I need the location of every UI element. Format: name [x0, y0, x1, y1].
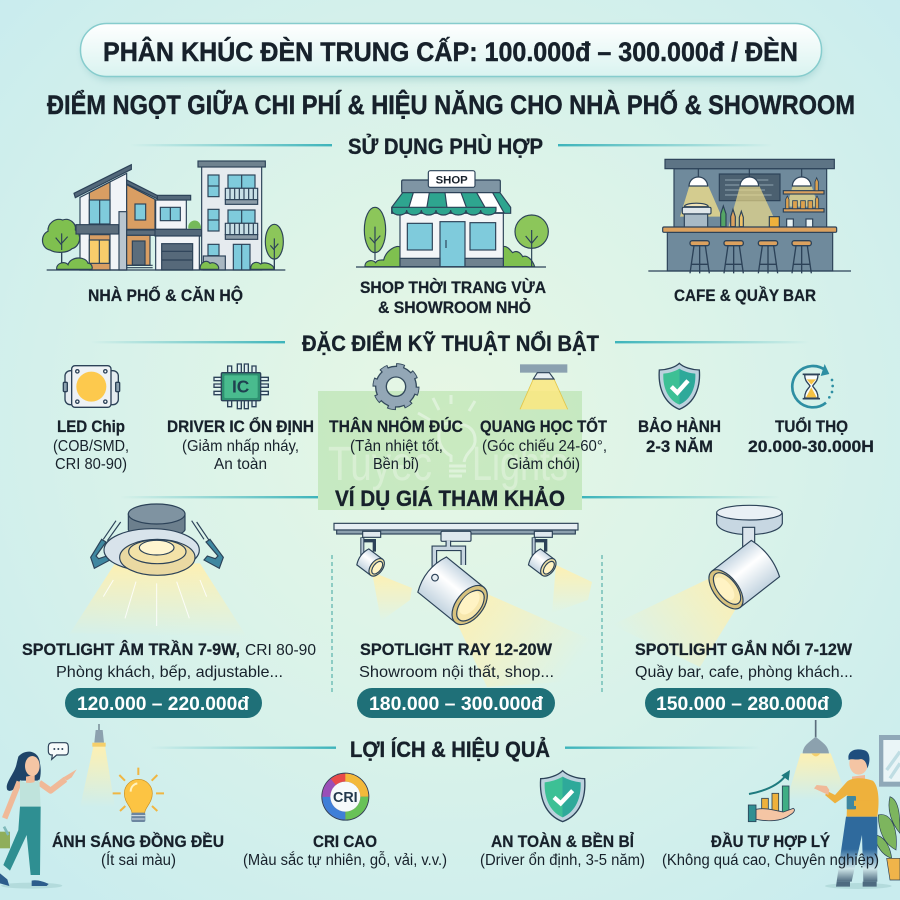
large head — [414, 541, 494, 631]
icon: CRI ring: CRI — [333, 790, 358, 806]
text: driver IC — [167, 417, 314, 473]
bottles and cups — [721, 206, 813, 227]
watermark panel — [318, 391, 582, 510]
product text: surface: Quầy bar, cafe, phòng khách... — [635, 664, 853, 681]
text: safe and durable: (Driver ổn định, 3-5 năm) — [480, 852, 645, 869]
speech bubble — [48, 743, 68, 759]
title pill: PHÂN KHÚC ĐÈN TRUNG CẤP: 100.000đ – 300.000đ / ĐÈN — [103, 37, 798, 67]
illustration: cafe bar — [648, 159, 851, 273]
illustration: man, lamp and plant — [787, 720, 900, 889]
coffee machine — [682, 203, 711, 227]
rail — [334, 523, 578, 541]
product text: track — [359, 640, 554, 681]
text: high CRI: CRI CAO — [313, 832, 377, 851]
icon: CRI ring — [321, 773, 369, 821]
trim ring — [104, 529, 199, 575]
text: lifespan — [748, 417, 874, 456]
light beam — [612, 578, 737, 667]
label: shop — [360, 278, 546, 317]
icon: LED chip — [63, 366, 120, 407]
section heading: benefits: LỢI ÍCH & HIỆU QUẢ — [350, 737, 550, 762]
text: even light — [52, 832, 224, 869]
product text: track: Showroom nội thất, shop... — [359, 664, 554, 681]
price pill: track: 180.000 – 300.000đ — [369, 693, 543, 715]
product text: recessed: SPOTLIGHT ÂM TRẦN 7-9W, — [22, 640, 240, 659]
icon: investment chart — [748, 770, 794, 822]
text: LED chip: (COB/SMD, — [53, 438, 129, 455]
shop sign — [428, 171, 475, 187]
bar wall — [665, 159, 834, 228]
cylinder — [702, 538, 783, 615]
counter — [663, 227, 837, 271]
section heading: technical features: ĐẶC ĐIỂM KỸ THUẬT NỔI BẬT — [302, 331, 600, 356]
section heading: usage: SỬ DỤNG PHÙ HỢP — [348, 134, 543, 159]
text: reasonable investment: (Không quá cao, Chuyên nghiệp) — [662, 852, 879, 869]
growth arrow — [749, 770, 790, 794]
text: high CRI: (Màu sắc tự nhiên, gỗ, vải, v.v.) — [243, 852, 447, 869]
text: high CRI — [243, 832, 447, 869]
plant — [874, 797, 900, 880]
product text: recessed — [22, 640, 316, 681]
text: LED chip: CRI 80-90) — [55, 456, 127, 473]
product: recessed spotlight illustration — [70, 504, 247, 637]
hand — [748, 805, 794, 822]
ceiling plate — [717, 505, 782, 551]
price pill: recessed: 120.000 – 220.000đ — [77, 693, 249, 715]
illustration: shop — [356, 171, 548, 267]
divider — [332, 555, 602, 695]
product: surface spotlight illustration — [612, 505, 783, 667]
price pill: surface — [645, 688, 842, 718]
illustration: woman and pendant lamp — [0, 724, 115, 889]
product text: recessed: Phòng khách, bếp, adjustable... — [56, 664, 283, 681]
text: LED chip: LED Chip — [57, 417, 125, 436]
text: optics: QUANG HỌC TỐT — [480, 416, 608, 436]
section heading: price examples: VÍ DỤ GIÁ THAM KHẢO — [335, 486, 565, 511]
small head left — [355, 537, 387, 579]
stools — [690, 241, 811, 273]
text: driver IC: DRIVER IC ỔN ĐỊNH — [167, 417, 314, 436]
small head right — [527, 537, 559, 579]
product text: surface — [635, 640, 853, 681]
watermark panel: Tuyec — [328, 438, 432, 491]
icon: lifespan hourglass — [792, 364, 834, 407]
text: LED chip — [53, 417, 129, 473]
product text: recessed: CRI 80-90 — [245, 642, 316, 659]
icon: driver IC — [214, 364, 268, 409]
wall picture — [879, 735, 900, 787]
text: even light: ÁNH SÁNG ĐỒNG ĐỀU — [52, 832, 224, 851]
text: optics — [480, 416, 608, 473]
text: safe and durable: AN TOÀN & BỀN BỈ — [491, 832, 634, 851]
text: reasonable investment — [662, 832, 879, 869]
man — [814, 749, 892, 889]
shop trees — [364, 207, 548, 267]
icon: gear — [376, 367, 416, 407]
icon: safety shield — [540, 771, 585, 822]
icon: optics lamp — [520, 364, 568, 409]
product text: surface: SPOTLIGHT GẮN NỔI 7-12W — [635, 640, 853, 659]
text: optics: (Góc chiếu 24-60°, — [482, 438, 607, 455]
product text: track: SPOTLIGHT RAY 12-20W — [360, 640, 553, 659]
text: optics: Giảm chói) — [507, 456, 580, 473]
icon: light bulb — [113, 768, 164, 822]
bars — [762, 786, 789, 814]
label: cafe bar: CAFE & QUẦY BAR — [674, 286, 816, 305]
light beam — [70, 563, 247, 637]
text: lifespan: 20.000-30.000H — [748, 437, 874, 456]
spring clips — [91, 521, 223, 568]
label: shop: & SHOWROOM NHỎ — [378, 298, 531, 317]
tall building — [198, 161, 265, 270]
price pill: track — [357, 688, 555, 718]
label: townhouse: NHÀ PHỐ & CĂN HỘ — [88, 285, 243, 305]
light beams — [372, 565, 592, 687]
text: warranty — [638, 417, 721, 456]
left tree — [42, 219, 80, 263]
text: reasonable investment: ĐẦU TƯ HỢP LÝ — [711, 832, 831, 851]
housing — [128, 504, 185, 537]
text: warranty: 2-3 NĂM — [646, 437, 713, 456]
text: cast aluminum body — [329, 417, 463, 473]
text: lifespan: TUỔI THỌ — [775, 417, 848, 436]
shelves and bottles — [783, 178, 824, 212]
price pill: surface: 150.000 – 280.000đ — [656, 693, 829, 715]
icon: warranty shield — [659, 363, 700, 409]
ceiling lamp — [787, 720, 848, 800]
text: cast aluminum body: THÂN NHÔM ĐÚC — [329, 417, 463, 436]
woman — [0, 752, 77, 889]
shop sign: SHOP — [436, 175, 468, 187]
bushes and right tree — [57, 224, 283, 270]
text: driver IC: (Giảm nhấp nháy, — [182, 438, 299, 455]
text: cast aluminum body: Bền bỉ) — [373, 456, 419, 473]
product: track spotlight illustration — [334, 523, 592, 687]
text: driver IC: An toàn — [214, 456, 267, 473]
text: safe and durable — [480, 832, 645, 869]
lamp — [80, 724, 115, 807]
pendant lights — [680, 169, 818, 227]
text: warranty: BẢO HÀNH — [638, 417, 721, 436]
shop building — [392, 180, 511, 267]
watermark panel: Lights — [472, 438, 568, 491]
price pill: recessed — [65, 688, 262, 718]
left building — [74, 165, 204, 270]
label: shop: SHOP THỜI TRANG VỪA — [360, 278, 546, 297]
title pill — [80, 24, 822, 80]
text: cast aluminum body: (Tản nhiệt tốt, — [350, 438, 443, 455]
illustration: townhouse — [42, 161, 285, 270]
text: even light: (Ít sai màu) — [101, 852, 176, 869]
icon: driver IC: IC — [232, 377, 250, 397]
